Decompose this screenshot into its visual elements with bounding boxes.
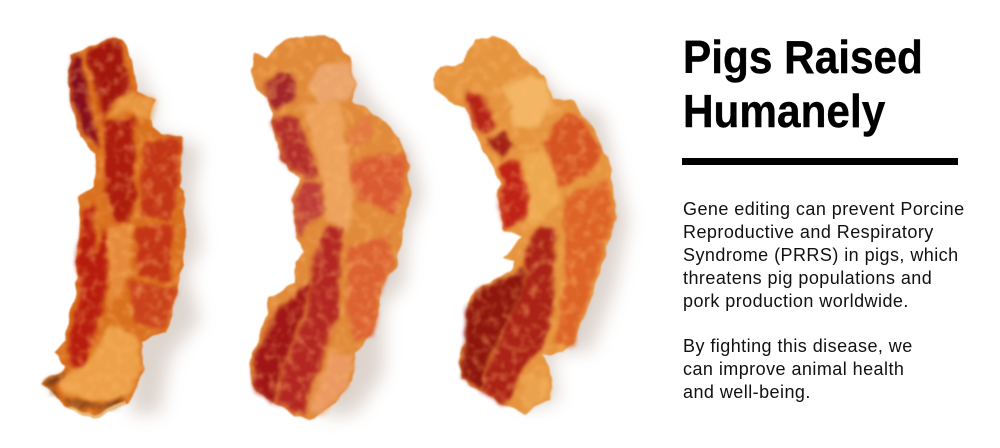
- bacon strip 2: [250, 35, 423, 418]
- paragraph: gene editing: [683, 199, 965, 311]
- bacon strip 1: [43, 39, 202, 418]
- title: Humanely: [683, 85, 885, 137]
- title: [683, 31, 923, 137]
- paragraph: animal health: [683, 336, 913, 402]
- paragraph: animal health: By fighting this disease, we: [683, 336, 913, 356]
- paragraph: gene editing: Gene editing can prevent Porcine: [683, 199, 965, 219]
- divider rule: [682, 158, 958, 165]
- paragraph: animal health: can improve animal health: [683, 359, 904, 379]
- paragraph: gene editing: pork production worldwide.: [683, 291, 909, 311]
- paragraph: gene editing: threatens pig populations and: [683, 268, 932, 288]
- title: Pigs Raised: [683, 31, 923, 83]
- bacon strip 3: [432, 35, 628, 412]
- paragraph: gene editing: Reproductive and Respiratory: [683, 222, 934, 242]
- paragraph: animal health: and well-being.: [683, 382, 811, 402]
- paragraph: gene editing: Syndrome (PRRS) in pigs, which: [683, 245, 959, 265]
